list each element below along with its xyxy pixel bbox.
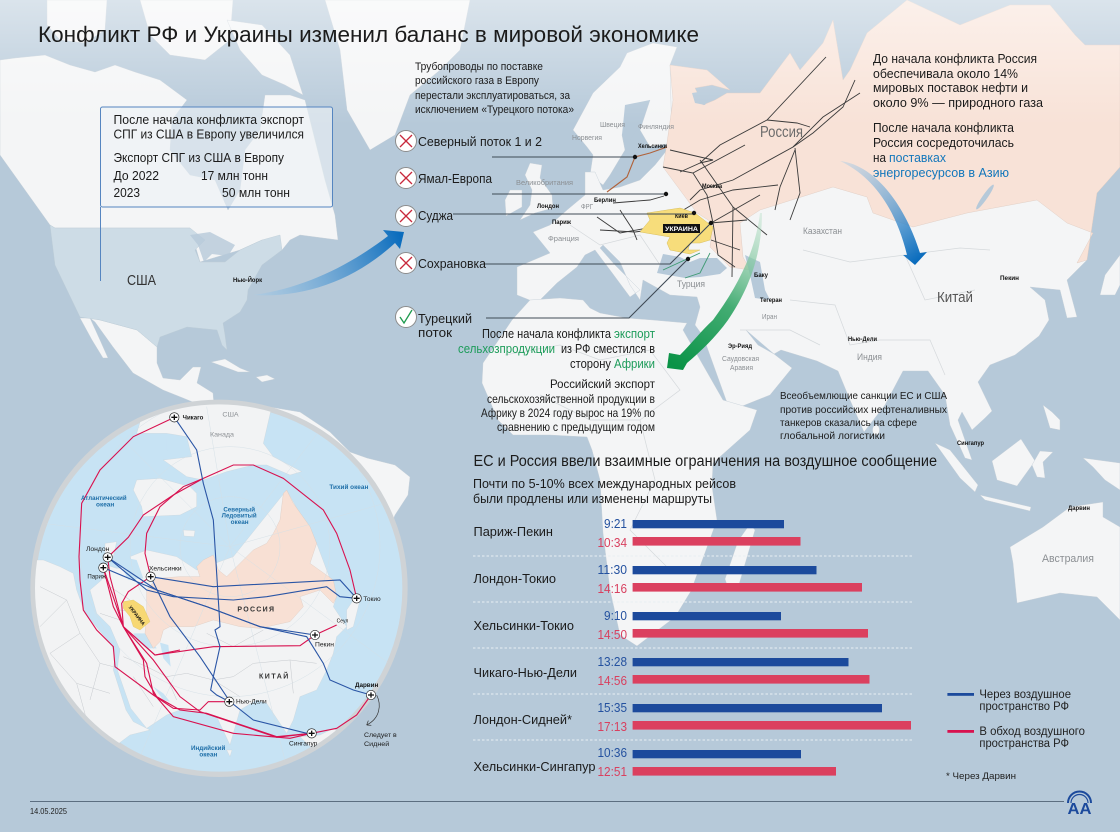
country labels on main map: Индия — [857, 352, 882, 362]
European city labels: Швеция — [600, 122, 625, 129]
Russia on globe — [145, 490, 337, 648]
panel: agri exports text: сравнению с предыдущим годом — [497, 420, 655, 434]
row: Helsinki-Tokyo: 9:10 — [604, 608, 627, 623]
panel: agri exports text: Африки — [614, 357, 655, 371]
panel: energy text: Россия сосредоточилась — [873, 135, 1014, 150]
globe routes bypassing Russian airspace — [79, 417, 371, 738]
pipeline: Nord Stream — [396, 130, 542, 152]
pipeline: Yamal-Europe: Ямал-Европа — [418, 171, 493, 186]
country labels on main map: Пекин — [1000, 275, 1019, 282]
panel: pipelines intro text: Трубопроводы по поставке — [415, 61, 543, 73]
European city labels: Великобритания — [516, 178, 573, 187]
globe labels: Сидней — [364, 740, 390, 748]
country labels on main map: Иран — [762, 312, 777, 321]
panel: pipelines intro text: перестали эксплуатироваться, за — [415, 90, 571, 102]
icon: Anadolu Agency logo: AA — [1068, 801, 1092, 818]
row: Paris-Beijing: 9:21 — [604, 516, 627, 531]
arrow: Russia agri exports to Africa — [667, 213, 762, 370]
country labels on main map: Нью-Дели — [848, 336, 877, 343]
row: Helsinki-Singapore: Хельсинки-Сингапур — [474, 759, 596, 774]
panel: sanctions text: Всеобъемлющие санкции ЕС и США — [780, 390, 947, 402]
pipeline: Sudzha: Суджа — [418, 208, 454, 223]
European city labels: Москва — [702, 183, 722, 190]
panel: USA LNG exports: 2023 — [114, 185, 140, 200]
row: London-Sydney: 15:35 — [598, 700, 627, 715]
globe labels: РОССИЯ — [237, 607, 274, 614]
row: Chicago-New Delhi: 13:28 — [598, 654, 627, 669]
bar chart: flight times — [473, 516, 912, 779]
arrow: LNG USA to Europe — [253, 230, 404, 295]
panel: energy text: энергоресурсов в Азию — [873, 165, 1009, 180]
panel: pipelines intro text: российского газа в Европу — [415, 75, 539, 87]
country labels on main map: Австралия — [1042, 553, 1094, 565]
country labels on main map: США — [127, 272, 156, 289]
country labels on main map: Китай — [937, 289, 973, 306]
European city labels: ФРГ — [581, 204, 593, 211]
callout lines for pipelines — [453, 155, 713, 318]
panel: pipelines intro text — [415, 61, 574, 116]
panel: energy text — [873, 51, 1044, 180]
globe labels: Тихий океан — [329, 484, 369, 491]
globe labels: Канада — [210, 432, 234, 439]
Ukraine on globe — [123, 600, 150, 630]
footer: 14.05.2025 — [30, 807, 68, 816]
globe labels: океан — [199, 753, 218, 759]
pipeline: Sokhranovka: Сохрановка — [418, 256, 487, 271]
panel: agri exports text: Российский экспорт — [550, 377, 655, 391]
row: London-Sydney: 17:13 — [598, 719, 627, 734]
globe labels: Северный — [223, 507, 255, 514]
Ukraine on main map: УКРАИНА — [665, 226, 698, 233]
European city labels: Берлин — [594, 197, 616, 204]
pipeline: TurkStream — [396, 306, 472, 340]
country labels on main map: Саудовская — [722, 356, 759, 363]
row: Chicago-New Delhi: Чикаго-Нью-Дели — [474, 665, 577, 680]
country labels on main map: Дарвин — [1068, 505, 1090, 512]
globe labels: Чикаго — [183, 414, 203, 421]
legend: пространства РФ — [979, 738, 1069, 750]
panel: agri exports text: из РФ сместился в — [561, 342, 655, 356]
globe labels: Сингапур — [289, 741, 318, 748]
pipeline: Sokhranovka — [396, 252, 487, 274]
country labels on main map — [127, 124, 1094, 565]
European city labels: Париж — [552, 219, 571, 226]
European city labels: Турция — [677, 279, 705, 289]
panel: energy text: мировых поставок нефти и — [873, 80, 1028, 95]
pipeline: TurkStream: поток — [418, 325, 452, 340]
panel: USA LNG exports: СПГ из США в Европу увеличился — [114, 126, 304, 142]
globe labels: КИТАЙ — [259, 671, 288, 680]
panel: agri exports text — [458, 327, 655, 434]
globe labels: Пекин — [315, 642, 335, 649]
Russia on the main map — [663, 0, 1120, 270]
European city labels: Киев — [675, 213, 688, 220]
European city labels: Лондон — [537, 203, 559, 210]
European city labels: Норвегия — [572, 135, 602, 142]
globe airports — [99, 413, 376, 738]
title: Конфликт РФ и Украины изменил баланс в мировой экономике — [38, 22, 699, 47]
country labels on main map: Баку — [754, 272, 768, 279]
row: London-Sydney — [474, 700, 911, 734]
pipeline: Nord Stream: Северный поток 1 и 2 — [418, 134, 542, 149]
country labels on main map: Россия — [760, 124, 803, 141]
arrow: Russia energy to Asia — [840, 161, 927, 265]
globe labels: Хельсинки — [149, 565, 182, 572]
pipeline network — [597, 57, 860, 278]
pipeline: Sudzha — [396, 206, 454, 226]
European city labels: Финляндия — [638, 124, 674, 131]
country labels on main map: Эр-Рияд — [728, 343, 752, 350]
panel: USA LNG exports — [100, 107, 332, 281]
row: London-Tokyo: 14:16 — [598, 581, 627, 596]
row: London-Tokyo — [474, 562, 862, 596]
panel: agri exports text: сельскохозяйственной продукции в — [487, 392, 655, 406]
panel: USA LNG exports: Экспорт СПГ из США в Европу — [114, 150, 285, 165]
row: London-Tokyo: 11:30 — [598, 562, 627, 577]
row: Helsinki-Tokyo: 14:50 — [598, 627, 627, 642]
row: Helsinki-Tokyo: Хельсинки-Токио — [474, 618, 574, 633]
globe labels — [81, 412, 397, 759]
pipeline: TurkStream: Турецкий — [418, 311, 472, 326]
globe country borders — [40, 587, 317, 720]
country labels on main map: Сингапур — [957, 440, 984, 447]
panel: energy text: около 9% — природного газа — [873, 95, 1044, 110]
chart heading: Почти по 5-10% всех международных рейсов — [473, 476, 736, 491]
panel: USA LNG exports: 50 млн тонн — [222, 185, 290, 200]
globe labels: Дарвин — [355, 682, 379, 689]
globe labels: океан — [96, 503, 115, 509]
country labels on main map: Казахстан — [803, 226, 842, 236]
legend: пространство РФ — [979, 701, 1069, 713]
chart heading: были продлены или изменены маршруты — [473, 491, 712, 506]
country labels on main map: Нью-Йорк — [233, 275, 263, 284]
panel: agri exports text: сторону — [570, 357, 612, 371]
globe labels: Индийский — [191, 745, 226, 752]
globe labels: Ледовитый — [222, 513, 257, 520]
row: Helsinki-Singapore: 12:51 — [598, 764, 627, 779]
row: Chicago-New Delhi — [474, 654, 870, 688]
European city labels — [516, 122, 722, 289]
panel: energy text: До начала конфликта Россия — [873, 51, 1037, 66]
row: Paris-Beijing: Париж-Пекин — [474, 524, 553, 539]
legend — [946, 689, 1085, 782]
globe inland seas — [122, 559, 171, 702]
European city labels: Хельсинки — [638, 143, 667, 150]
legend: Через воздушное — [979, 689, 1071, 701]
globe labels: Токио — [363, 596, 381, 603]
chart heading — [473, 453, 937, 506]
Ukraine on globe: УКРАИНА — [127, 605, 146, 627]
panel: sanctions text: глобальной логистики — [780, 430, 885, 442]
panel: USA LNG exports: До 2022 — [114, 168, 159, 183]
globe: flight routes map — [27, 397, 405, 774]
panel: pipelines intro text: исключением «Турецкого потока» — [415, 104, 574, 116]
globe labels: Париж — [87, 573, 107, 580]
globe labels: Сеул — [337, 619, 348, 625]
panel: USA LNG exports: После начала конфликта экспорт — [114, 112, 304, 127]
panel: sanctions text: против российских нефтеналивных — [780, 404, 948, 416]
panel: USA LNG exports: 17 млн тонн — [201, 168, 268, 183]
row: Chicago-New Delhi: 14:56 — [598, 673, 627, 688]
legend: * Через Дарвин — [946, 771, 1016, 782]
row: Helsinki-Singapore — [474, 745, 836, 779]
globe labels: США — [222, 412, 239, 419]
row: Helsinki-Tokyo — [474, 608, 868, 642]
globe routes through Russian airspace — [103, 417, 371, 733]
row: London-Tokyo: Лондон-Токио — [474, 571, 556, 586]
panel: sanctions text: танкеров сказались на сфере — [780, 417, 917, 429]
globe labels: Следует в — [364, 732, 397, 739]
panel: energy text: После начала конфликта — [873, 120, 1015, 135]
European city labels: Франция — [548, 234, 579, 243]
globe labels: Атлантический — [81, 495, 127, 502]
panel: agri exports text: После начала конфликта — [482, 327, 611, 341]
pipeline: Yamal-Europe — [396, 168, 493, 188]
chart heading: ЕС и Россия ввели взаимные ограничения на воздушное сообщение — [474, 453, 937, 470]
country labels on main map: Аравия — [730, 365, 753, 372]
arrow: continues to Sydney — [367, 695, 379, 725]
legend: В обход воздушного — [979, 726, 1085, 738]
row: London-Sydney: Лондон-Сидней* — [474, 712, 572, 727]
panel: energy text: на — [873, 150, 887, 165]
row: Paris-Beijing: 10:34 — [598, 535, 627, 550]
globe labels: Лондон — [86, 546, 110, 553]
globe land masses — [35, 404, 364, 756]
icon: Anadolu Agency logo — [1068, 792, 1092, 818]
panel: sanctions text — [780, 390, 948, 442]
panel: energy text: поставках — [889, 150, 946, 165]
globe labels: Нью-Дели — [236, 698, 267, 705]
panel: energy text: обеспечивала около 14% — [873, 66, 1018, 81]
panel: agri exports text: сельхозпродукции — [458, 342, 555, 356]
row: Helsinki-Singapore: 10:36 — [598, 745, 627, 760]
Ukraine on main map — [640, 208, 713, 254]
panel: agri exports text: экспорт — [614, 327, 655, 341]
panel: agri exports text: Африку в 2024 году вырос на 19% по — [481, 406, 655, 420]
country labels on main map: Тегеран — [760, 297, 782, 304]
globe labels: океан — [231, 520, 249, 526]
row: Paris-Beijing — [474, 516, 800, 550]
